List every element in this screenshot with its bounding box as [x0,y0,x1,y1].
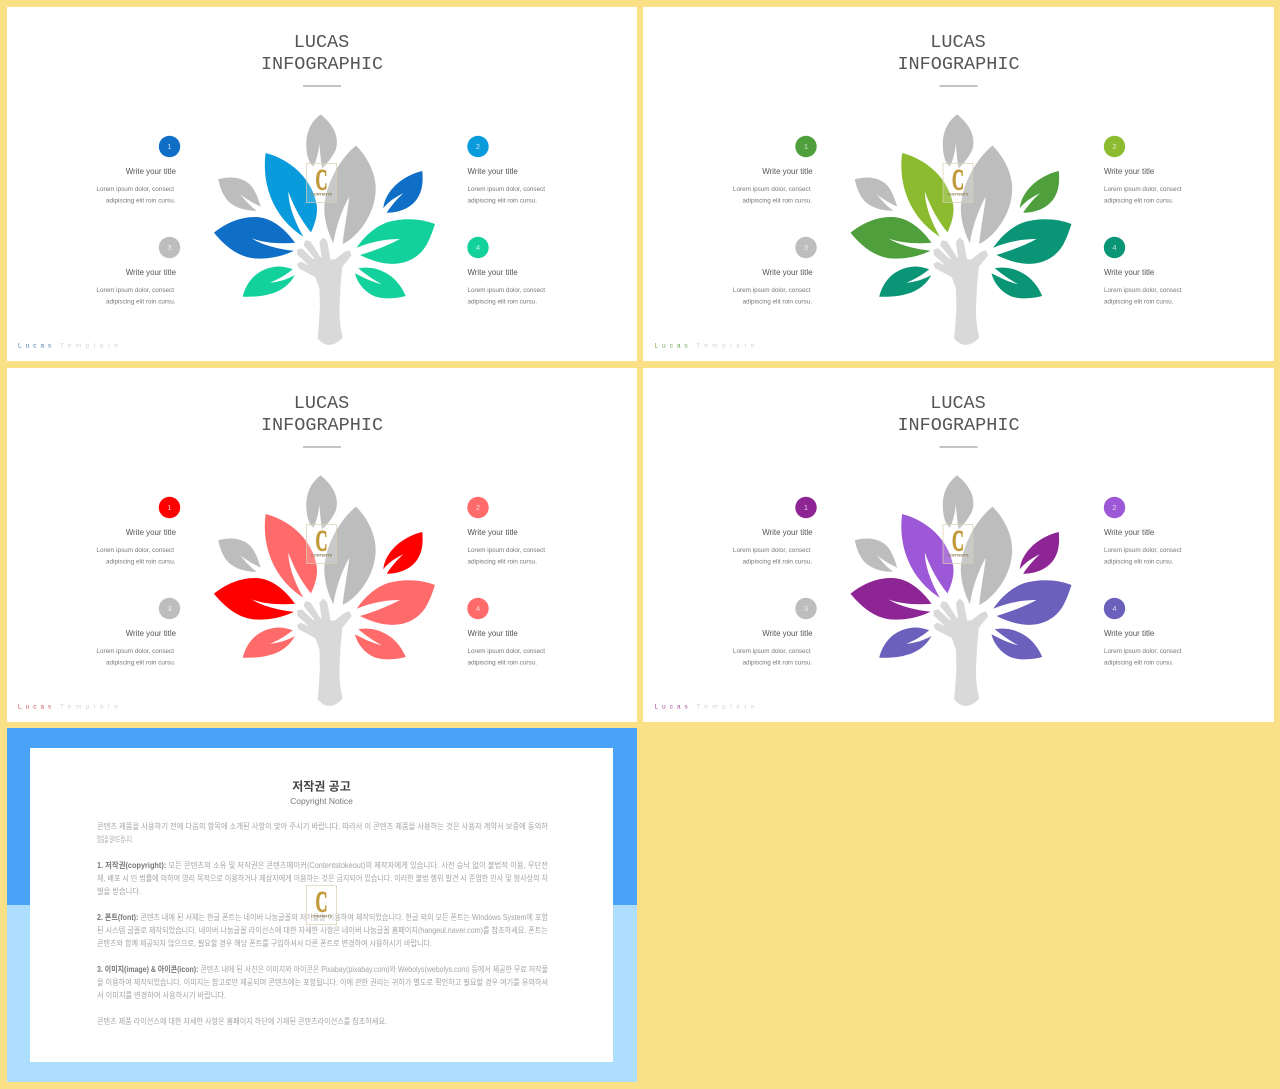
leaf: large upper left [901,153,954,237]
footer label: Lucas [654,342,692,350]
copyright closing line: 콘텐츠 제품 라이선스에 대한 자세한 사항은 홈페이지 하단에 기재된 콘텐츠라이선스를 참조하세요. [97,1016,387,1026]
item 1: 1 [167,503,172,512]
leaf: large upper left [265,514,317,598]
item 2 [467,136,545,204]
item 3 [96,598,180,666]
item 3: 3 [804,243,808,252]
item 2: adipiscing elit roin cursu. [1104,198,1174,204]
leaf: lower right [992,629,1042,659]
watermark: C [316,164,328,196]
item 4 [467,237,545,306]
watermark: C [952,524,964,558]
footer label: Lucas [18,704,55,710]
copyright section 2: 콘텐츠와 함께 제공되지 않으므로, 필요할 경우 해당 폰트를 구입하셔서 다른 폰트로 변경하여 사용하시기 바랍니다. [97,938,432,948]
tree illustration [214,114,435,344]
item 2: adipiscing elit roin cursu. [468,198,537,204]
item 3: adipiscing elit roin cursu. [743,298,812,306]
item 3: Lorem ipsum dolor, consect [96,648,174,655]
item 2 [1104,497,1182,566]
item 4: adipiscing elit roin cursu. [1104,298,1174,306]
footer label [18,342,122,350]
footer label: Template [60,704,122,710]
copyright section 1: 1. 저작권(copyright): 모든 콘텐츠의 소유 및 저작권은 콘텐츠메이커(Contentstokeout)의 제작자에게 있습니다. 사전 승낙 없이 불법적 이용, 무단전 [97,860,548,870]
item 2 [1104,136,1182,204]
panel: blue infographic [7,7,637,361]
copyright heading: 저작권 공고 [292,778,351,794]
item 2: Lorem ipsum dolor, consect [468,547,545,554]
item 1: adipiscing elit roin cursu. [743,558,812,566]
leaf: top grey [306,114,337,168]
item 3: 3 [167,604,172,613]
item 4: Write your title [1104,268,1155,277]
leaf: large upper left [265,153,317,237]
panel: green infographic [643,7,1274,361]
footer label: Lucas [18,342,55,350]
copyright section 3: 서 이미지를 변경하여 사용하시기 바랍니다. [97,990,226,1000]
footer label [654,704,759,710]
item 1: Lorem ipsum dolor, consect [733,186,811,193]
leaf: small grey left [855,177,897,211]
watermark [943,164,973,202]
leaf: top grey [306,475,337,529]
copyright section 2: 된 시스템 글꼴로 제작되었습니다. 네이버 나눔글꼴 라이선스에 대한 자세한 사항은 네이버 나눔글꼴 홈페이지(hangeul.naver.com)를 참조하세요. 폰트는 [97,925,548,935]
item 4: 4 [1112,604,1117,613]
watermark [306,164,336,202]
item 2: Write your title [1104,528,1155,537]
watermark [306,524,336,564]
item 4: Lorem ipsum dolor, consect [468,287,545,294]
item 1: Write your title [126,167,177,176]
panel: red infographic [7,368,637,722]
item 1 [733,497,817,566]
item 3: Write your title [126,629,177,638]
item 3 [96,237,180,306]
footer label: Template [696,342,759,350]
item 1: Lorem ipsum dolor, consect [96,547,174,554]
title [261,32,383,75]
item 1: adipiscing elit roin cursu. [743,198,812,204]
copyright intro [97,821,549,844]
item 4: adipiscing elit roin cursu. [468,298,537,306]
watermark: CONTENTS [948,192,969,196]
watermark: C [316,524,328,558]
panel: purple infographic [643,368,1274,722]
leaf: large left [850,217,932,259]
watermark: CONTENTS [311,192,333,196]
leaf: lower right [355,268,406,298]
item 3: 3 [167,243,172,252]
item 3 [733,237,817,306]
item 3: Lorem ipsum dolor, consect [733,648,811,655]
item 1: 1 [167,142,172,151]
item 1: Lorem ipsum dolor, consect [96,186,174,193]
leaf: small upper right [1020,532,1059,574]
leaf: large right [993,580,1072,625]
item 2: Lorem ipsum dolor, consect [468,186,545,193]
title: INFOGRAPHIC [261,54,383,75]
item 2: adipiscing elit roin cursu. [1104,558,1174,566]
item 1: 1 [804,142,808,151]
leaf: large right [993,219,1072,264]
footer label [654,342,759,350]
footer label [18,704,122,710]
copyright section 2 [97,912,549,948]
leaf: large right [357,219,435,264]
item 4: Lorem ipsum dolor, consect [468,648,545,655]
item 3: adipiscing elit roin cursu. [743,660,812,666]
hand trunk [298,238,351,344]
item 2: adipiscing elit roin cursu. [468,558,537,566]
item 2: Lorem ipsum dolor, consect [1104,186,1182,193]
item 4: adipiscing elit roin cursu. [468,660,537,666]
item 2 [467,497,545,566]
tree illustration [850,475,1072,705]
item 3: Write your title [126,268,177,277]
copyright section 1: 벌을 받습니다. [97,886,141,896]
leaf: small grey left [218,538,261,572]
leaf: lower right [355,629,406,659]
tree illustration [214,475,435,705]
title: INFOGRAPHIC [261,415,383,436]
leaf: small upper right [1020,171,1059,213]
item 1 [733,136,817,204]
item 4: 4 [476,243,480,252]
watermark: CONTENTS [311,914,333,918]
tree illustration [850,114,1072,344]
leaf: large grey [324,146,376,244]
copyright intro: 였음을 알려드립니다. [97,834,133,844]
copyright heading [290,778,353,806]
item 3: Lorem ipsum dolor, consect [96,287,174,294]
leaf: small upper right [383,171,423,213]
item 4: Write your title [468,268,518,277]
item 4 [467,598,545,666]
copyright section 1 [97,860,548,896]
hand trunk [298,599,351,705]
item 2: Write your title [468,167,518,176]
item 4: adipiscing elit roin cursu. [1104,660,1174,666]
leaf: small grey left [218,177,261,211]
item 1: Write your title [126,528,177,537]
item 2: Write your title [468,528,518,537]
leaf: large left [214,217,295,259]
copyright heading: Copyright Notice [290,796,353,806]
copyright section 3: 3. 이미지(image) & 아이콘(icon): 콘텐츠 내에 된 사진은 이미지와 아이콘은 Pixabay(pixabay.com)와 Webolys(webolys.com) 등에서 제공한 무료 저작물 [97,964,548,974]
item 2: 2 [476,142,480,151]
item 1: adipiscing elit roin cursu. [106,198,176,204]
leaf: top grey [943,475,973,529]
item 1: Write your title [762,167,813,176]
item 1 [96,497,180,566]
item 2: 2 [476,503,480,512]
leaf: large upper left [901,514,954,598]
item 1: Write your title [762,528,813,537]
leaf: small grey left [855,538,897,572]
watermark: C [316,886,328,918]
hand trunk [934,238,988,344]
leaf: lower left [243,266,295,297]
item 3: Write your title [762,629,813,638]
title [261,393,383,436]
watermark [943,524,973,564]
watermark: CONTENTS [311,554,333,558]
leaf: large grey [961,507,1012,605]
item 2: 2 [1112,142,1117,151]
title [897,32,1020,75]
copyright section 1: 재, 배포 시 민 법률에 의하여 영리 목적으로 이용하거나 제삼자에게 이용하는 것은 금지되어 있습니다. 이러한 불법 행위 발견 시 준엄한 민사 및 형사상의 처 [97,873,548,883]
item 4: 4 [1112,243,1117,252]
item 3 [733,598,817,666]
watermark [306,886,336,924]
leaf: top grey [943,114,973,168]
item 2: Write your title [1104,167,1155,176]
item 4: Write your title [1104,629,1155,638]
leaf: large left [850,578,932,620]
item 4 [1104,237,1182,306]
item 4: Write your title [468,629,518,638]
item 1: 1 [804,503,808,512]
title: INFOGRAPHIC [897,54,1020,75]
leaf: lower left [879,266,932,297]
item 4: Lorem ipsum dolor, consect [1104,287,1182,294]
leaf: large grey [961,146,1012,244]
item 1 [96,136,180,204]
item 3: 3 [804,604,808,613]
copyright section 2: 2. 폰트(font): 콘텐츠 내에 된 서체는 한글 폰트는 네이버 나눔글꼴의 저작물을 이용하여 제작되었습니다. 한글 외의 모든 폰트는 Windows System에 포함 [97,912,549,922]
item 2: Lorem ipsum dolor, consect [1104,547,1182,554]
item 1: Lorem ipsum dolor, consect [733,547,811,554]
title: LUCAS [294,32,349,53]
leaf: lower left [879,628,932,658]
item 3: Write your title [762,268,813,277]
title: INFOGRAPHIC [897,415,1020,436]
copyright section 3 [97,964,548,1000]
watermark: CONTENTS [948,554,969,558]
item 4: Lorem ipsum dolor, consect [1104,648,1182,655]
copyright intro: 콘텐츠 제품을 사용하기 전에 다음의 항목에 소개된 사항이 맞아 주시기 바랍니다. 따라서 이 콘텐츠 제품을 사용하는 것은 사용자 계약서 보증에 동의하 [97,821,549,831]
footer label: Lucas [654,704,692,710]
leaf: small upper right [383,532,423,574]
item 4: 4 [476,604,480,613]
copyright section 3: 을 이용하여 제작되었습니다. 이미지는 참고로만 제공되며 콘텐츠에는 포함됩니다. 이에 관한 권리는 귀하가 별도로 확인하고 필요할 경우 여기를 유의하셔 [97,977,548,987]
panel: copyright notice [7,728,637,1082]
item 1: adipiscing elit roin cursu. [106,558,176,566]
footer label: Template [696,704,759,710]
title: LUCAS [930,32,986,53]
hand trunk [934,599,988,705]
item 4 [1104,598,1182,666]
item 3: Lorem ipsum dolor, consect [733,287,811,294]
item 3: adipiscing elit roin cursu. [106,298,176,306]
footer label: Template [60,342,122,350]
title [897,393,1020,436]
leaf: lower left [243,628,295,658]
leaf: lower right [992,268,1042,298]
leaf: large left [214,578,295,620]
title: LUCAS [294,393,349,414]
item 3: adipiscing elit roin cursu. [106,660,176,666]
leaf: large right [357,580,435,625]
leaf: large grey [324,507,376,605]
watermark: C [952,164,964,196]
title: LUCAS [930,393,986,414]
item 2: 2 [1112,503,1117,512]
